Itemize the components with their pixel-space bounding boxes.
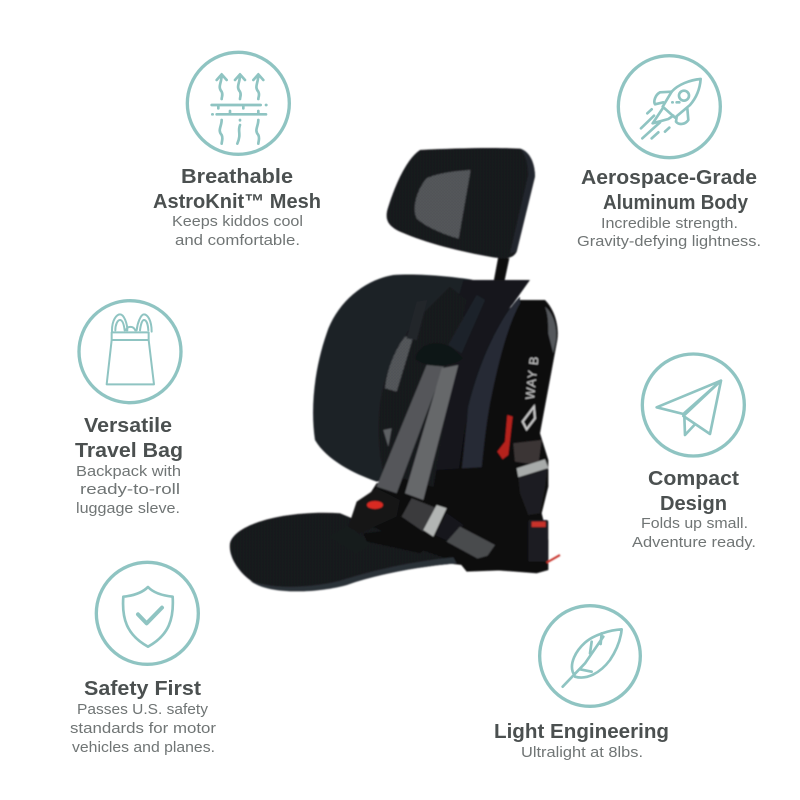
side buckle [513, 440, 542, 465]
feature: breathable mesh [153, 52, 321, 249]
description: Backpack with [76, 464, 181, 480]
feature: aluminum body [577, 56, 761, 250]
heading [648, 468, 739, 515]
icon: mesh with rising air [187, 52, 289, 154]
grey harness straps [377, 365, 444, 493]
shoulder strap pad [448, 295, 485, 353]
icon: rocket [618, 56, 720, 158]
icon: bag [79, 301, 181, 403]
icon: feather [540, 606, 640, 706]
description [70, 702, 216, 756]
description [172, 214, 303, 249]
center mesh panel [378, 287, 467, 487]
description: standards for motor [70, 721, 216, 737]
description [76, 464, 181, 517]
description: Folds up small. [641, 516, 748, 532]
heading [75, 415, 183, 462]
description [577, 216, 761, 250]
description: Incredible strength. [601, 216, 738, 232]
description: Gravity-defying lightness. [577, 234, 761, 250]
description: Keeps kiddos cool [172, 214, 303, 230]
feature: travel bag [75, 301, 183, 517]
red release handle [497, 415, 513, 459]
headrest post [493, 257, 509, 287]
heading: Compact [648, 468, 739, 490]
crotch buckle [330, 488, 437, 553]
body logo text: WAY B [523, 355, 542, 400]
seat cushion [230, 513, 457, 591]
heading: Aluminum Body [603, 192, 749, 214]
heading [581, 167, 757, 214]
icon: paper plane [642, 354, 744, 456]
heading: Aerospace-Grade [581, 167, 757, 189]
heading: Travel Bag [75, 440, 183, 462]
description: ready-to-roll [80, 482, 180, 498]
headrest [387, 148, 535, 258]
description: Ultralight at 8lbs. [521, 745, 643, 761]
lower dark frame behind the belts [353, 467, 507, 570]
car seat product photo [230, 148, 560, 591]
chest clip [415, 343, 463, 366]
heading: Light Engineering [494, 721, 669, 743]
lap belt and buckle [402, 498, 515, 572]
heading: Versatile [84, 415, 172, 437]
heading: Safety First [84, 678, 201, 700]
feature: light engineering [494, 606, 669, 761]
icon: shield with check [96, 562, 198, 664]
back cushion [313, 275, 473, 482]
side wing [427, 280, 530, 507]
heading [153, 166, 321, 213]
brand tag [407, 300, 427, 340]
heading: Breathable [181, 166, 293, 188]
heading: Design [660, 493, 727, 515]
description: and comfortable. [175, 233, 300, 249]
description: Passes U.S. safety [77, 702, 209, 718]
description: Adventure ready. [632, 535, 756, 551]
black aluminum body [453, 300, 560, 573]
heading: AstroKnit™ Mesh [153, 191, 321, 213]
feature: compact design [632, 354, 756, 551]
description: luggage sleve. [76, 501, 180, 517]
description: vehicles and planes. [72, 740, 215, 756]
description [632, 516, 756, 551]
feature: safety first [70, 562, 216, 756]
